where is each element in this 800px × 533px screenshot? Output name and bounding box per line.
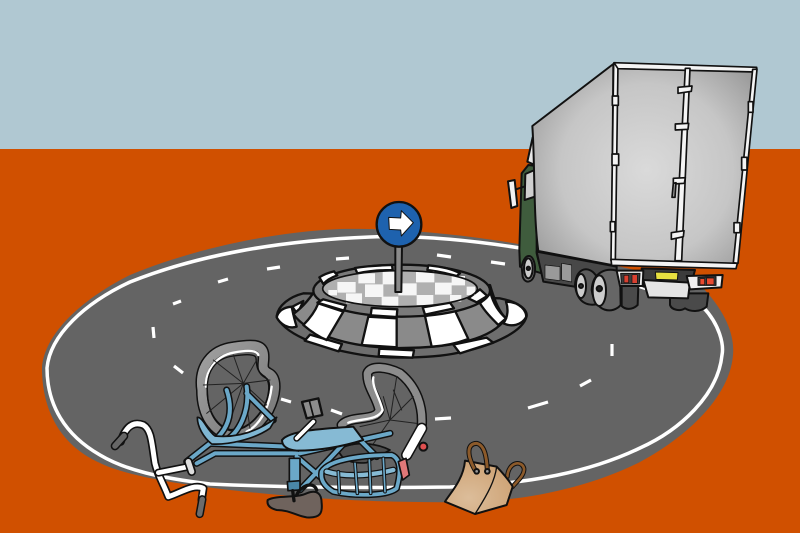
bicycle seat post	[293, 485, 317, 501]
bag body	[445, 461, 513, 514]
island top rim	[313, 265, 490, 317]
island checkered centre	[323, 271, 477, 307]
truck door frame	[610, 63, 757, 269]
shopping bag	[445, 443, 524, 514]
licence plate	[655, 272, 678, 280]
bicycle pedal	[297, 398, 322, 438]
lane dashes	[153, 255, 612, 419]
island slope stripes	[293, 285, 506, 348]
truck wheels	[522, 256, 708, 311]
bicycle front mudguard	[197, 417, 277, 444]
handlebar grip right	[200, 499, 202, 514]
road edge line	[47, 237, 722, 488]
road surface	[42, 229, 733, 502]
bicycle handlebar	[115, 424, 203, 514]
bicycle basket	[321, 455, 399, 495]
sky	[0, 0, 800, 149]
tail light left	[621, 273, 640, 284]
truck	[508, 63, 757, 311]
road sign	[377, 202, 421, 292]
bicycle frame	[187, 387, 390, 491]
truck mirror	[508, 180, 517, 208]
ground	[0, 149, 800, 533]
truck box rear	[612, 64, 757, 267]
bicycle chain guard	[282, 427, 363, 451]
bicycle rear wheel	[338, 368, 422, 463]
truck cab	[508, 137, 542, 273]
sign pole	[395, 245, 402, 292]
roundabout island	[277, 265, 527, 358]
truck chassis	[537, 252, 617, 293]
handlebar grip left	[115, 436, 124, 446]
truck box side	[532, 64, 613, 265]
island base ring	[277, 293, 527, 358]
bicycle saddle	[267, 492, 322, 517]
bag far handle	[507, 463, 524, 487]
icon: direction arrow	[389, 211, 413, 236]
tail light right	[698, 277, 716, 285]
bicycle front wheel	[201, 346, 275, 435]
bicycle rear mudguard and reflector	[398, 428, 427, 480]
bag near handle	[469, 443, 487, 470]
truck rear bumper	[617, 268, 723, 298]
bicycle	[115, 346, 427, 517]
sign disc	[377, 202, 421, 247]
